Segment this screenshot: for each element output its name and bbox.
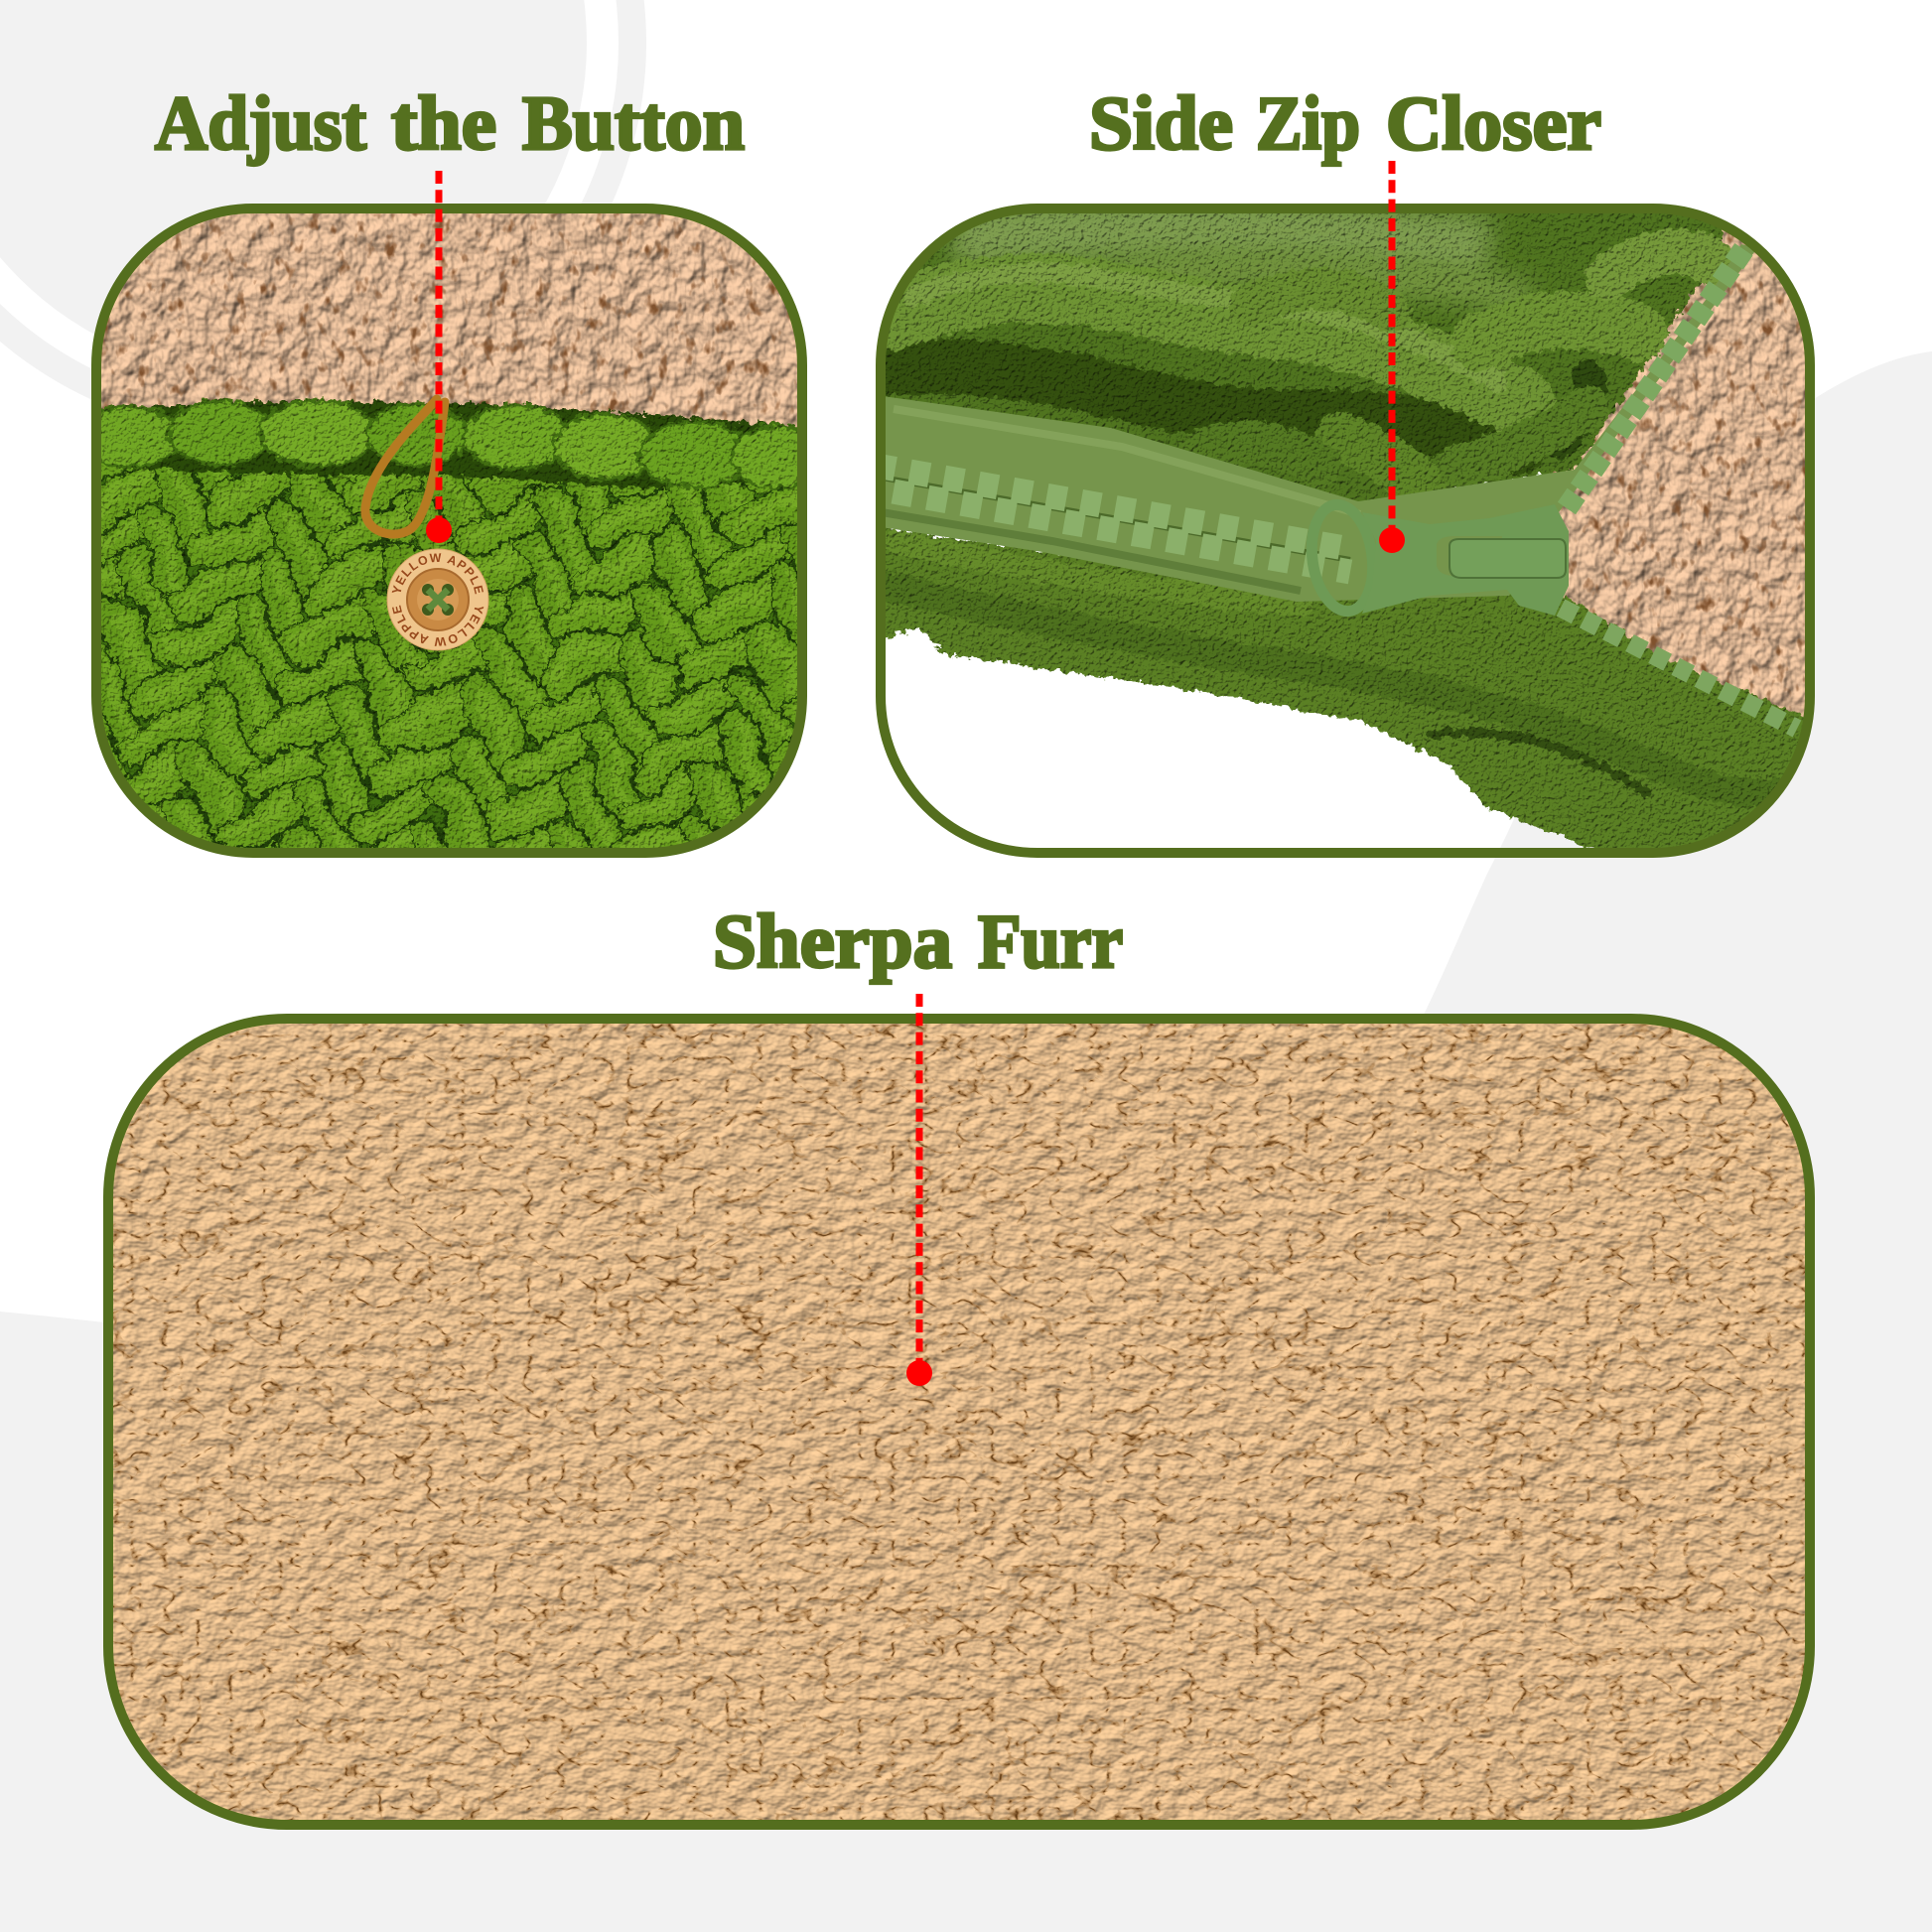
heading: Sherpa Furr: Furr <box>978 898 1123 984</box>
zipper teeth upper right <box>1567 244 1747 508</box>
heading: Sherpa Furr: Sherpa <box>713 898 952 984</box>
upper green knit <box>876 204 1727 506</box>
heading: Side Zip Closer: Closer <box>1386 80 1601 166</box>
wooden button <box>387 548 488 651</box>
sherpa fur texture <box>103 1013 1815 1830</box>
panel: button photo <box>91 204 807 858</box>
panel: zipper photo <box>876 204 1815 864</box>
tan fur side <box>1549 228 1815 720</box>
green herringbone knit <box>101 463 797 848</box>
zipper slider <box>1306 500 1569 616</box>
rope loop <box>365 399 445 534</box>
wooden button: YELLOW APPLE <box>392 606 484 646</box>
callout: button pointer <box>426 171 452 543</box>
frame <box>96 208 802 853</box>
heading: Side Zip Closer: Zip <box>1256 80 1360 166</box>
callout: sherpa pointer <box>906 994 932 1386</box>
zipper teeth left <box>876 466 1350 572</box>
tan fur band <box>101 213 797 427</box>
frame <box>881 208 1810 853</box>
lower green knit <box>876 526 1815 864</box>
zipper teeth lower right <box>1561 608 1797 729</box>
wooden button: YELLOW APPLE <box>391 553 483 594</box>
frame <box>108 1019 1810 1825</box>
panel: sherpa photo <box>103 1013 1815 1830</box>
heading: Adjust the Button: Adjust <box>155 80 366 166</box>
callout: zipper pointer <box>1379 161 1405 553</box>
heading: Adjust the Button: Button <box>522 80 745 166</box>
heading: Adjust the Button: the <box>391 80 496 166</box>
zipper tape <box>876 244 1757 602</box>
green top rope row <box>73 400 827 488</box>
heading: Side Zip Closer: Side <box>1089 80 1233 166</box>
